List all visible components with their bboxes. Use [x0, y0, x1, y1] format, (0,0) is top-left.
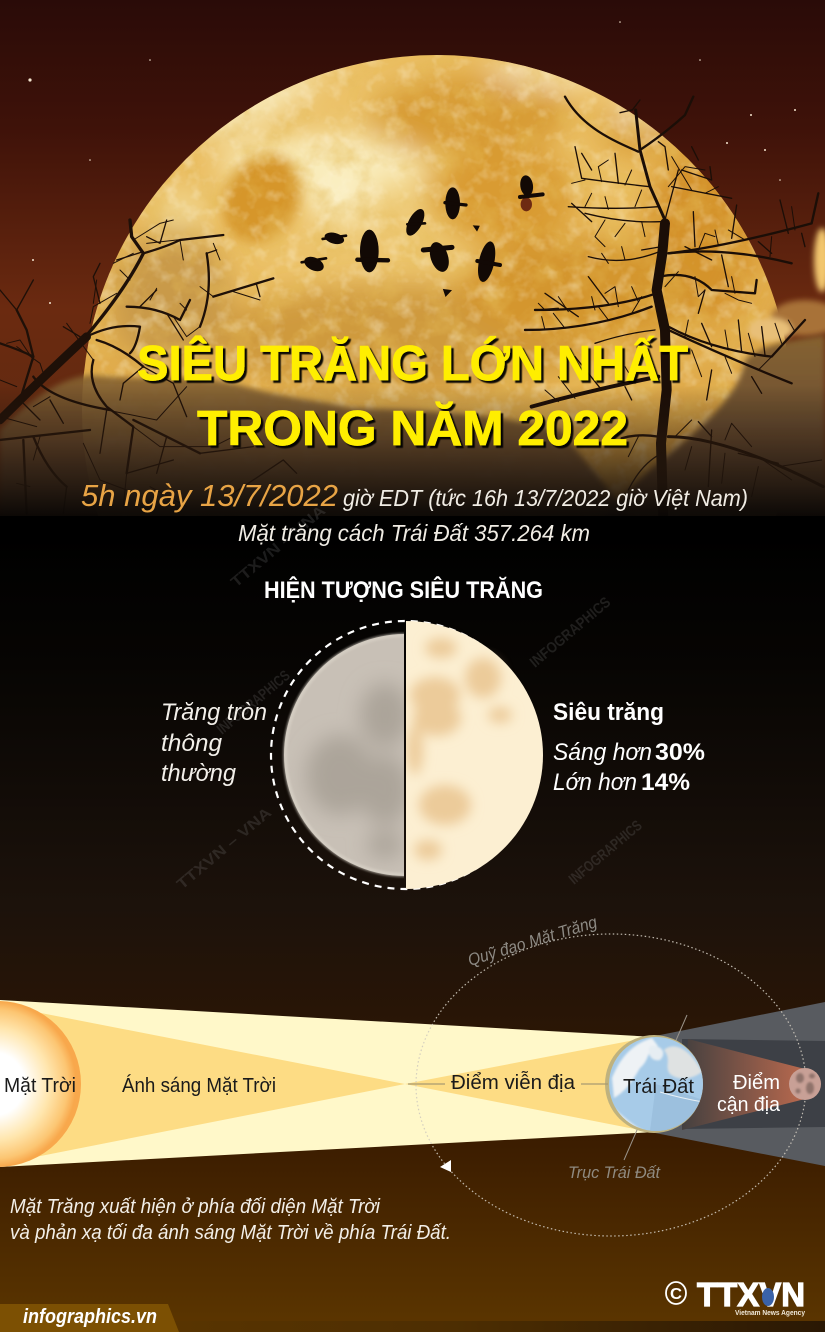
icon: sun — [0, 1001, 81, 1167]
watermarks: TTXVN – VNA — [228, 502, 329, 591]
logo: TTXVN: C — [670, 1286, 682, 1303]
icon: moon at perigee — [789, 1068, 821, 1100]
moon orbit — [416, 934, 806, 1236]
date and distance subtitle: giờ EDT (tức 16h 13/7/2022 giờ Việt Nam) — [343, 485, 748, 511]
icon: supermoon outline — [271, 621, 539, 889]
clouds — [0, 228, 825, 516]
label: supermoon facts: 14% — [641, 769, 690, 796]
title — [137, 336, 688, 456]
diagram labels: Mặt Trời — [4, 1075, 76, 1097]
explanatory note: và phản xạ tối đa ánh sáng Mặt Trời về phía Trái Đất. — [10, 1222, 451, 1244]
label: supermoon facts: 30% — [655, 739, 705, 766]
diagram labels: Điểm viễn địa — [451, 1071, 576, 1094]
left tree — [0, 220, 297, 513]
title: SIÊU TRĂNG LỚN NHẤT — [137, 336, 688, 391]
explanatory note: Mặt Trăng xuất hiện ở phía đối diện Mặt Trời — [10, 1196, 381, 1218]
logo: TTXVN — [666, 1276, 806, 1317]
watermarks: TTXVN – VNA — [174, 804, 275, 893]
date and distance subtitle: 5h ngày 13/7/2022 — [81, 478, 338, 513]
diagram labels: Ánh sáng Mặt Trời — [122, 1074, 276, 1097]
watermarks: INFOGRAPHICS — [214, 667, 294, 738]
diagram labels: Điểm — [733, 1072, 780, 1094]
diagram labels: cận địa — [717, 1094, 781, 1116]
label: supermoon facts: Sáng hơn — [553, 739, 652, 766]
logo: TTXVN: TTXVN — [697, 1276, 805, 1313]
logo: TTXVN: Vietnam News Agency — [735, 1308, 806, 1317]
footer tab: website: infographics.vn — [23, 1306, 157, 1328]
footer strip — [0, 1321, 825, 1332]
label: supermoon facts: Lớn hơn — [553, 769, 637, 796]
big moon — [82, 55, 786, 498]
bottom fade of hero — [0, 385, 825, 516]
label: normal full moon: thông — [161, 730, 223, 757]
diagram labels: Trái Đất — [623, 1076, 694, 1098]
label: normal full moon: Trăng tròn — [161, 699, 267, 726]
normal full moon half — [282, 632, 404, 878]
icon: orbit direction arrow — [440, 1160, 451, 1172]
orbit label: Quỹ đạo Mặt Trăng — [466, 912, 600, 970]
watermarks: INFOGRAPHICS — [566, 817, 646, 888]
axis label: Trục Trái Đất — [568, 1163, 661, 1182]
label: normal full moon — [161, 699, 267, 787]
earth axis — [624, 1015, 687, 1160]
footer tab: website — [0, 1304, 179, 1332]
section heading: HIỆN TƯỢNG SIÊU TRĂNG — [264, 576, 543, 604]
label: supermoon facts: Siêu trăng — [553, 699, 664, 726]
label: supermoon facts — [553, 699, 705, 796]
birds — [302, 175, 543, 296]
diagram: earth shadow — [650, 1002, 825, 1166]
diagram: sunlight beam — [0, 1000, 655, 1167]
stars — [28, 21, 796, 304]
diagram labels — [4, 1071, 781, 1116]
moon size comparison — [267, 621, 543, 889]
watermarks — [174, 502, 646, 893]
title: TRONG NĂM 2022 — [197, 402, 628, 456]
explanatory note — [10, 1196, 451, 1244]
supermoon half — [406, 621, 543, 889]
hero photo: moon, birds and trees — [0, 0, 825, 520]
date and distance subtitle: Mặt trăng cách Trái Đất 357.264 km — [238, 520, 590, 546]
icon: earth — [605, 1035, 703, 1133]
date and distance subtitle — [81, 478, 748, 546]
leader lines — [408, 1083, 608, 1085]
right tree — [525, 97, 823, 520]
watermarks: INFOGRAPHICS — [527, 594, 614, 671]
label: normal full moon: thường — [161, 760, 237, 787]
